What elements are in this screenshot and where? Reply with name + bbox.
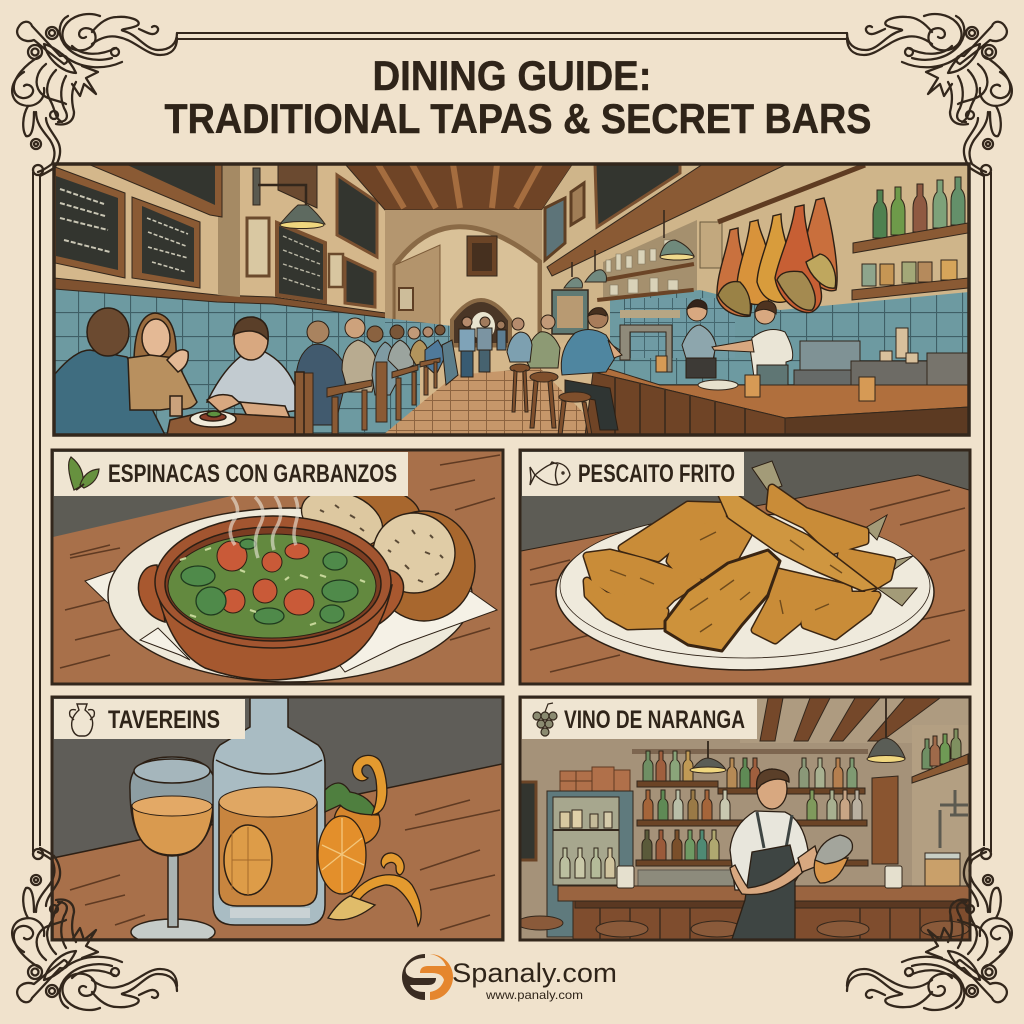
panel B label: PESCAITO FRITO [578, 460, 735, 488]
chalkboard five [345, 258, 375, 307]
ceiling [740, 698, 969, 743]
chalkboard inner top [125, 164, 215, 205]
back shelves [636, 781, 868, 866]
panel: pescaito frito [521, 451, 969, 683]
panel C label [54, 699, 245, 739]
fish tails [752, 461, 917, 606]
left wood rail [56, 278, 385, 318]
hero border [54, 164, 969, 435]
wall pillar [218, 164, 240, 297]
front fried fish [665, 550, 780, 651]
panel C border [52, 697, 503, 940]
title: TRADITIONAL TAPAS & SECRET BARS [164, 95, 872, 142]
bar counter [585, 356, 969, 436]
wall sign [700, 222, 722, 268]
wall frame [247, 218, 269, 276]
icon: grapes [533, 703, 557, 736]
fish texture [610, 532, 842, 632]
wood grain [60, 455, 500, 668]
panel B border [520, 450, 970, 684]
panel D label: VINO DE NARANGA [564, 706, 745, 734]
ornament: bottom left corner [12, 848, 177, 1010]
orange peel curls [328, 755, 421, 926]
seated man at bar [561, 308, 622, 430]
panel A border [52, 450, 503, 684]
chalkboard two surface [142, 206, 194, 282]
bartender one [682, 300, 716, 378]
bar stools [510, 364, 592, 435]
wall shelves with bottles [597, 240, 694, 318]
logo: www.panaly.com [485, 988, 583, 1002]
bottles [642, 751, 862, 860]
ornament: bottom right corner [847, 848, 1012, 1010]
foreground woman [128, 313, 197, 416]
page frame [33, 33, 991, 852]
foreground man with fork [207, 317, 302, 418]
jar [925, 853, 960, 888]
chalkboard three [277, 223, 325, 302]
panel A label [54, 452, 408, 496]
small frame [329, 254, 343, 287]
bread loaf back [294, 480, 420, 558]
crates [560, 767, 630, 791]
left tiled wall [54, 284, 420, 435]
logo [402, 954, 617, 1002]
panel B label [522, 452, 744, 496]
lower right shelf [852, 260, 968, 300]
bartender two [712, 301, 793, 392]
orange half [318, 816, 366, 894]
pendant lamps [690, 698, 905, 773]
far archway [452, 300, 510, 345]
upper wall picture [278, 164, 317, 208]
ornament: top left corner [12, 14, 177, 176]
dark background wedge [53, 451, 240, 537]
panel C label: TAVEREINS [108, 706, 220, 734]
panel A label: ESPINACAS CON GARBANZOS [108, 460, 397, 488]
panel D border [520, 697, 970, 940]
icon: fish [530, 462, 570, 485]
wall pipes [940, 790, 968, 848]
floor [385, 368, 586, 434]
hanging lamps [564, 210, 694, 288]
chalkboard one surface [56, 176, 118, 270]
bar back equipment [794, 328, 968, 390]
diner tables [304, 358, 440, 435]
framed cabinet by corridor [552, 290, 588, 334]
orange behind and leaves [325, 783, 380, 845]
icon: spanaly logo [402, 954, 453, 1000]
decanter [213, 698, 325, 925]
wood table [53, 764, 502, 939]
wall lamp [253, 168, 325, 228]
fried fish fill [587, 488, 892, 640]
seated row of diners [296, 318, 458, 425]
chalkboard one [55, 167, 125, 278]
chalkboard upper right [595, 164, 680, 227]
back counter items [638, 870, 768, 888]
menu holders [617, 866, 902, 888]
overhead beam [547, 164, 787, 276]
corridor side wall [394, 244, 440, 324]
glass [130, 757, 216, 945]
chalkboard left [518, 782, 536, 860]
foreground man from behind [54, 308, 165, 435]
plate [108, 508, 472, 682]
arch interior wall [395, 227, 540, 345]
bar patrons [507, 315, 560, 368]
napkin left [85, 568, 122, 605]
door [872, 776, 898, 864]
fridge [547, 791, 633, 937]
plate [556, 514, 934, 670]
panel: espinacas con garbanzos [53, 451, 502, 683]
icon: amphora [70, 704, 94, 736]
bar counter [558, 886, 969, 939]
title [164, 52, 872, 142]
title: DINING GUIDE: [372, 52, 652, 99]
panel D label [522, 699, 757, 739]
stew surface [168, 534, 376, 638]
back rail [632, 749, 868, 754]
chalkboard two [132, 197, 200, 288]
wood grain [530, 490, 965, 672]
corridor picture [399, 288, 413, 310]
corridor tiled band [385, 318, 450, 348]
bartender [730, 769, 852, 939]
panel: tavern hero scene [54, 164, 969, 436]
spinach leaves [181, 539, 358, 624]
bread loaf front [373, 511, 475, 621]
panel: vino de naranga [517, 698, 969, 939]
long fish [717, 493, 877, 591]
ornament: top right corner [847, 14, 1012, 176]
right wall frames [545, 183, 584, 260]
wood table [521, 475, 969, 683]
bar stools [517, 916, 969, 937]
right wall [542, 166, 572, 332]
right tile wall [610, 290, 968, 384]
top right shelf [853, 177, 968, 253]
hanging hams [717, 165, 865, 316]
foreground table with plate [167, 372, 304, 435]
steam [230, 496, 298, 558]
right wall [912, 725, 969, 895]
chalkboard four [337, 175, 377, 257]
window [467, 236, 497, 276]
stew flecks [180, 548, 365, 625]
icon: spinach leaves [69, 457, 99, 490]
chalkboard top left [88, 164, 222, 217]
right shelf [912, 729, 968, 783]
standing crowd [459, 317, 506, 377]
ceiling [345, 164, 573, 210]
recess behind shelves [603, 220, 697, 300]
napkin under bowl [140, 586, 497, 672]
bowl [138, 516, 404, 680]
fried fish outlines [587, 488, 892, 640]
panel: tavereins [53, 698, 502, 945]
beer tap [620, 325, 672, 372]
chorizo slices [217, 541, 314, 615]
end wall [385, 210, 542, 319]
logo: Spanaly.com [452, 958, 617, 988]
wood grain [70, 800, 500, 930]
